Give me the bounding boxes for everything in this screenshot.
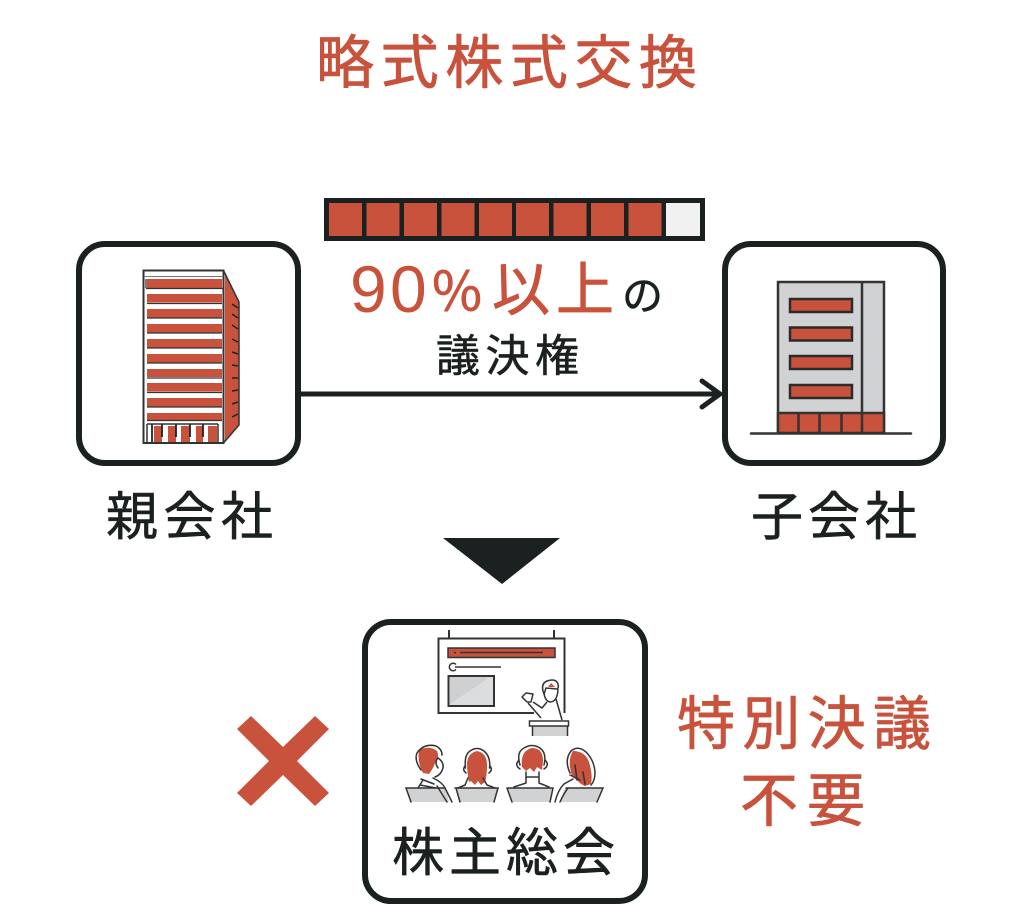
label: 90% or more: 9 (350, 252, 387, 326)
label: 90% or more (350, 252, 614, 326)
person 1 (406, 745, 452, 802)
person 4 (555, 748, 603, 802)
label: subsidiary: 子会社 (751, 489, 917, 547)
icon: low office building (751, 282, 911, 434)
person 2 (455, 748, 498, 802)
arrow: downward triangle (443, 538, 560, 584)
title: 略式株式交換 (316, 31, 697, 96)
label: 90% or more: 上 (556, 258, 614, 323)
label: parent company: 親会社 (106, 489, 273, 547)
icon: presentation screen with speaker (438, 630, 568, 736)
label: 90% or more: 0 (390, 252, 427, 326)
arrow: parent to subsidiary (300, 381, 720, 407)
panel: shareholders meeting (365, 622, 645, 901)
label: 90% or more: 以 (492, 258, 550, 323)
panel: subsidiary (725, 244, 943, 463)
icon: tall office building (144, 270, 239, 443)
label: voting rights: 議決権 (436, 332, 579, 381)
label: no: の (622, 273, 663, 319)
label: 90% or more: ％ (430, 263, 484, 323)
person 3 (507, 746, 553, 802)
label: not required: 不要 (740, 769, 865, 834)
label: shareholders meeting: 株主総会 (392, 825, 615, 883)
label: special resolution: 特別決議 (677, 692, 931, 757)
progress bar: 9 of 10 cells (324, 198, 705, 241)
panel: parent company (79, 244, 298, 463)
icon: red cross (237, 716, 329, 806)
icon: audience of four (406, 745, 603, 802)
